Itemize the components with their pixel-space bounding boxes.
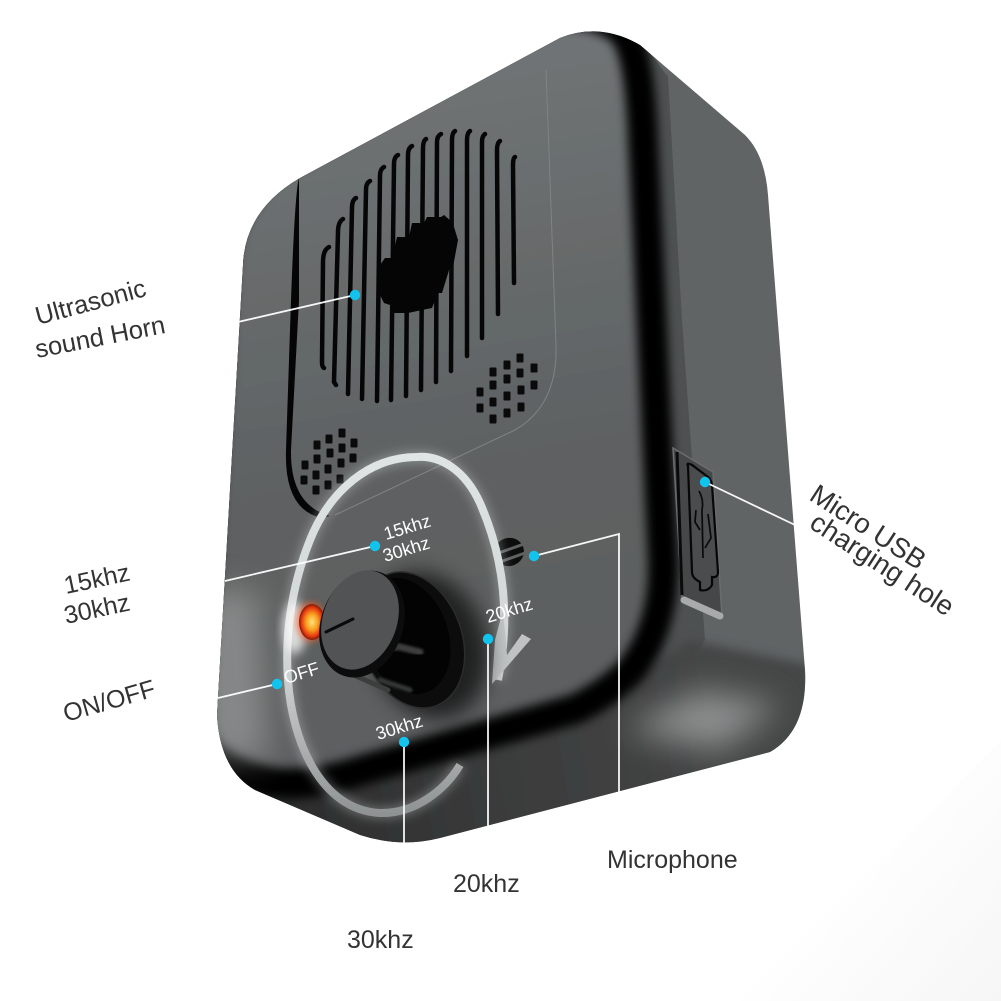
label: on/off: ON/OFF <box>60 675 158 728</box>
background corner shade <box>740 740 1001 1001</box>
microphone hole <box>490 534 528 570</box>
leader lines <box>218 295 795 848</box>
led indicator <box>283 602 326 654</box>
label: 15khz 30khz: 30khz <box>61 589 133 630</box>
label: micro usb charging hole: Micro USB <box>805 478 932 576</box>
label: 15khz 30khz: 15khz <box>61 559 133 600</box>
device labels on face: 15khz <box>381 511 433 544</box>
knob pointer <box>326 619 353 632</box>
label: ultrasonic sound horn: Ultrasonic <box>32 274 149 331</box>
label: 30khz: 30khz <box>347 926 414 954</box>
knob <box>305 555 508 735</box>
device labels on face: OFF <box>281 658 322 688</box>
upper right vent grid <box>476 354 538 424</box>
rotation ring arrow <box>287 457 531 813</box>
horn centre <box>380 215 458 313</box>
knob cap <box>308 559 412 681</box>
device labels on face: 30khz <box>373 711 425 744</box>
label: ultrasonic sound horn <box>32 274 168 364</box>
label: micro usb charging hole: charging hole <box>805 506 960 622</box>
marker dots <box>272 290 710 747</box>
label: 20khz: 20khz <box>453 870 520 898</box>
device labels on face: 30khz <box>380 533 432 566</box>
device labels on face: 20khz <box>483 594 535 627</box>
label: 15khz 30khz <box>61 559 133 630</box>
label: microphone: Microphone <box>607 846 738 874</box>
device labels on face <box>281 511 535 744</box>
speaker plate outline <box>286 70 556 518</box>
label: ultrasonic sound horn: sound Horn <box>33 311 168 364</box>
usb port <box>673 448 722 617</box>
speaker horn slots <box>322 131 515 401</box>
device body <box>217 31 806 842</box>
lower left vent grid <box>300 428 358 494</box>
